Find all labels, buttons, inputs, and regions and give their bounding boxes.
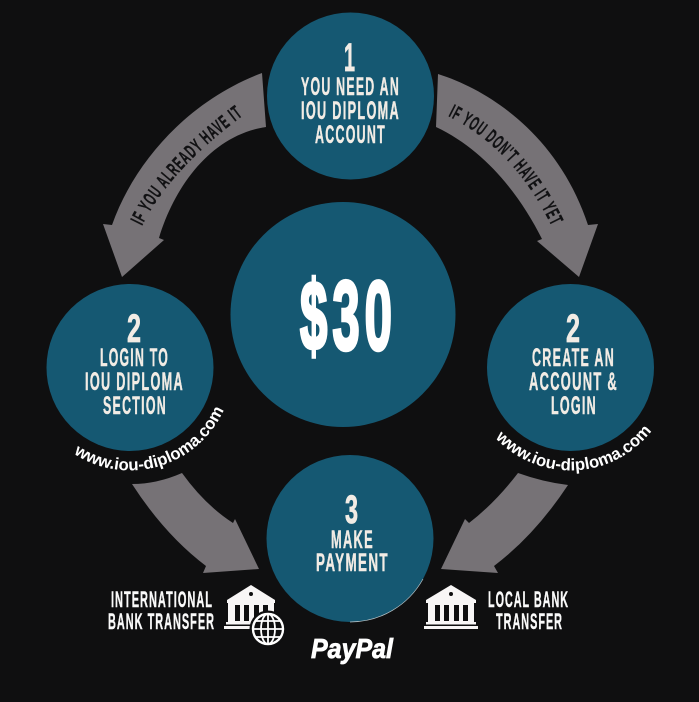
panel: step 2 create account: LOGIN	[551, 393, 597, 420]
panel: step 3: MAKE	[331, 527, 374, 554]
arrow: if you don't have it yet	[436, 74, 598, 277]
panel: step 1: ACCOUNT	[315, 122, 386, 149]
panel: price: $30	[300, 260, 397, 370]
panel: step 3: 3	[345, 488, 358, 532]
label: local bank transfer: TRANSFER	[496, 609, 563, 634]
label: international bank transfer	[108, 587, 215, 634]
label: local bank transfer	[488, 587, 569, 634]
logo: PayPal: PayPal	[311, 633, 394, 664]
icon: bank with globe	[224, 585, 286, 648]
panel: step 2 create account: 2	[566, 307, 580, 351]
panel: step 3	[266, 455, 434, 622]
icon: local bank	[424, 585, 478, 629]
panel: step 2 login: IOU DIPLOMA	[85, 369, 184, 396]
panel: step 2 create account: CREATE AN	[532, 345, 615, 372]
panel: step 2 create account: ACCOUNT &	[529, 369, 618, 396]
panel: step 1: IOU DIPLOMA	[301, 98, 400, 125]
infographic: LOCAL BANK	[488, 587, 569, 612]
panel: price	[230, 202, 456, 427]
panel: step 2 login: LOGIN TO	[100, 345, 169, 372]
arrow: right login to payment	[441, 473, 568, 573]
label: international bank transfer: BANK TRANSFER	[108, 609, 215, 634]
arrow: if you already have it	[103, 73, 266, 277]
panel: step 2 create account	[487, 284, 654, 451]
arrow: left login to payment	[132, 473, 259, 573]
panel: step 1	[267, 12, 434, 180]
url: left: www.iou-diploma.com	[76, 408, 224, 470]
panel: step 1: YOU NEED AN	[301, 74, 400, 101]
panel: step 2 login: 2	[127, 307, 141, 351]
url: right: www.iou-diploma.com	[496, 426, 652, 474]
label: international bank transfer: INTERNATIONAL	[111, 587, 213, 612]
panel: step 2 login: SECTION	[103, 393, 167, 420]
panel: step 3: PAYMENT	[316, 550, 389, 577]
panel: step 1: 1	[344, 36, 355, 80]
panel: step 2 login	[46, 284, 214, 451]
arrow: if you don't have it yet: IF YOU DON'T HAVE IT YET	[448, 104, 564, 224]
arrow: if you already have it: IF YOU ALREADY HAVE IT	[130, 104, 242, 226]
